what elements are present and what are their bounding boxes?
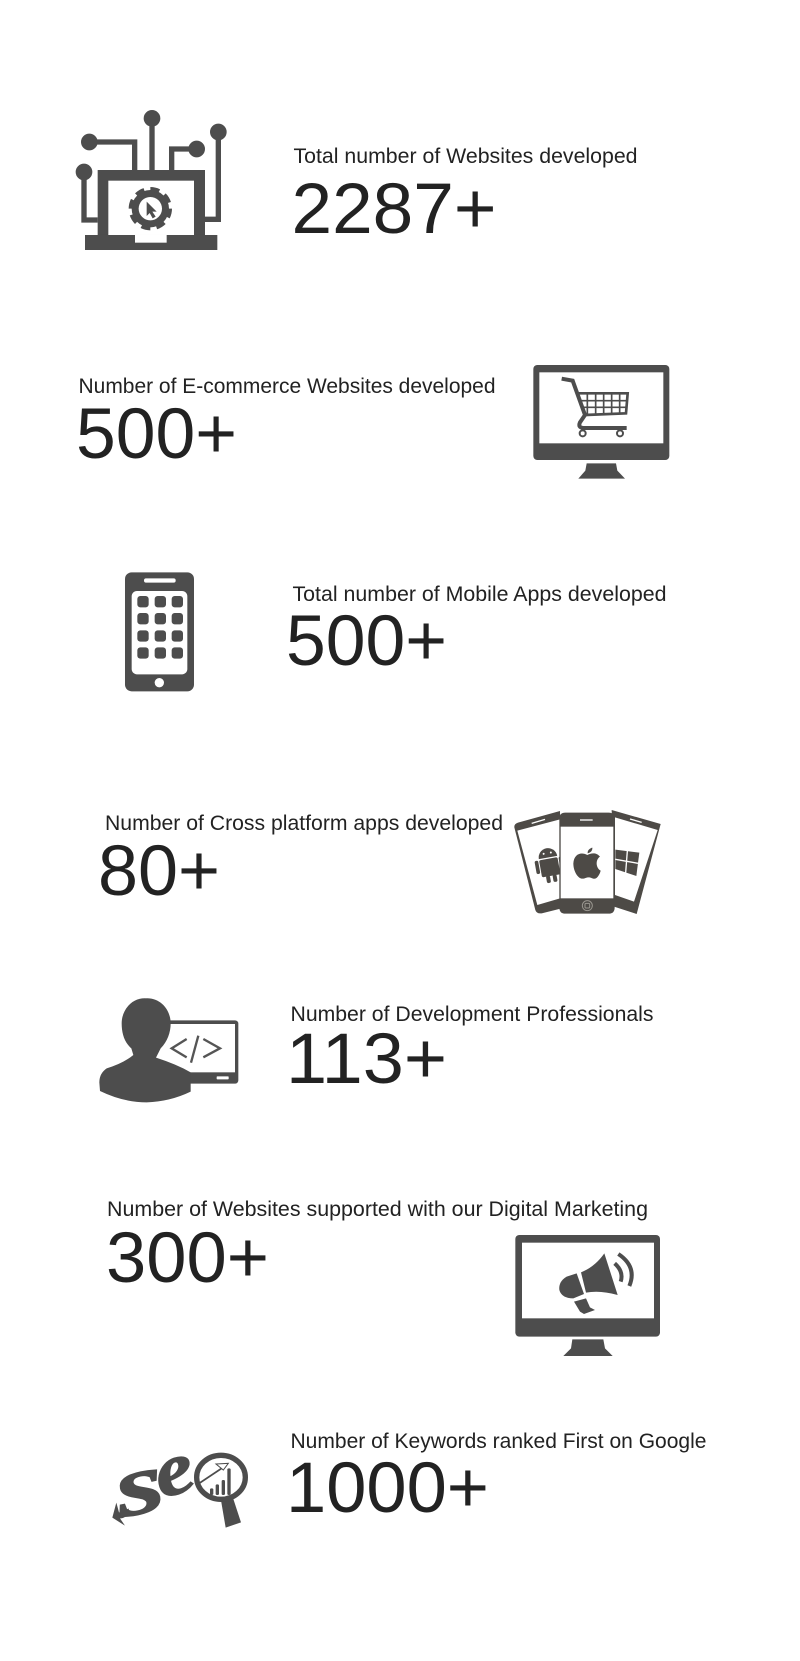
row: keywords ranked xyxy=(104,1424,706,1537)
row: e-commerce websites xyxy=(76,365,669,479)
row: digital marketing xyxy=(106,1198,660,1356)
icon: monitor with shopping cart xyxy=(533,365,669,479)
icon: laptop circuit with gear xyxy=(76,110,227,250)
label: keywords ranked: Number of Keywords ranked First on Google xyxy=(290,1430,706,1453)
label: total websites: Total number of Websites developed xyxy=(294,145,638,168)
number: 500+: 500+ xyxy=(76,395,237,474)
label: digital marketing: Number of Websites supported with our Digital Marketing xyxy=(107,1198,648,1221)
number: 2287+: 2287+ xyxy=(292,170,496,249)
icon: SEO magnifier: e xyxy=(141,1424,204,1515)
row: mobile apps xyxy=(125,572,667,691)
icon: monitor with megaphone xyxy=(515,1235,660,1356)
number: 113+: 113+ xyxy=(286,1020,447,1099)
number: 500+: 500+ xyxy=(286,602,447,681)
row: cross platform apps xyxy=(98,810,661,914)
label: mobile apps: Total number of Mobile Apps developed xyxy=(292,583,666,606)
icon: SEO magnifier xyxy=(104,1424,245,1537)
number: 80+: 80+ xyxy=(98,832,220,911)
row: total websites xyxy=(76,110,638,250)
label: cross platform apps: Number of Cross platform apps developed xyxy=(105,812,503,835)
icon: smartphone with app grid xyxy=(125,572,194,691)
row: development professionals xyxy=(99,998,653,1102)
icon: SEO magnifier: s xyxy=(104,1433,172,1537)
icon: developer with code screen xyxy=(99,998,238,1102)
number: 1000+: 1000+ xyxy=(286,1449,489,1528)
label: development professionals: Number of Development Professionals xyxy=(290,1003,654,1026)
label: e-commerce websites: Number of E-commerce Websites developed xyxy=(78,375,496,398)
number: 300+: 300+ xyxy=(106,1219,269,1298)
icon: three phones with platform logos xyxy=(514,810,661,914)
